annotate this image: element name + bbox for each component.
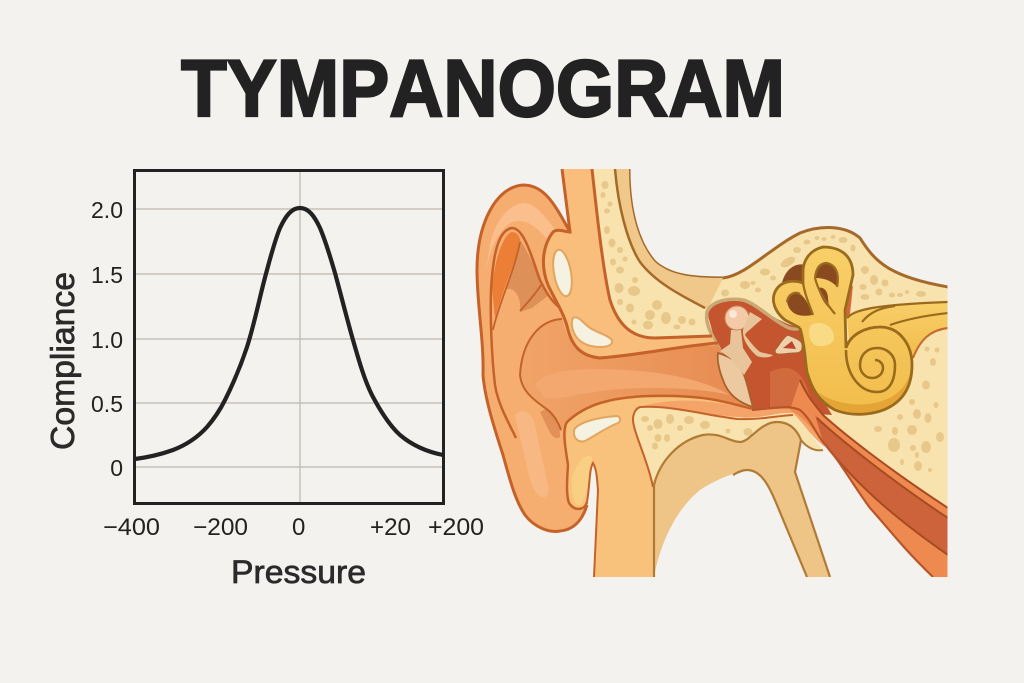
- pinna outline: [477, 185, 587, 531]
- inner ear outlines: [773, 247, 912, 414]
- mandible tan: [654, 422, 830, 577]
- crease shadow: [540, 408, 560, 438]
- chart frame: [134, 170, 444, 504]
- red patch behind canal: [846, 285, 853, 317]
- title: TYMPANOGRAM: [181, 42, 785, 134]
- vestibular nerve: [847, 302, 948, 358]
- ossicles: [720, 306, 802, 375]
- canal holes: [815, 263, 838, 287]
- stapes: [775, 335, 802, 354]
- bony canal band: [615, 169, 723, 310]
- grid lines: [135, 171, 442, 503]
- y axis tick labels: 2.0: [91, 197, 123, 223]
- illustration: ear anatomy: [477, 169, 948, 577]
- temporal bone: [592, 169, 948, 520]
- bony canal inner line: [615, 169, 705, 308]
- concha shadow: [505, 240, 549, 312]
- malleus head: [725, 306, 749, 330]
- x axis tick labels: +20: [370, 514, 411, 541]
- eustachian tube: [752, 380, 948, 577]
- lower jaw skin: [564, 396, 752, 577]
- y axis tick labels: 1.5: [91, 262, 123, 288]
- x axis tick labels: 0: [292, 514, 305, 541]
- scapha: [492, 232, 520, 318]
- inner fold line: [493, 242, 541, 330]
- antihelix line: [491, 228, 560, 438]
- vestibule and cochlea body: [773, 247, 912, 414]
- x axis title: Pressure: [231, 554, 366, 590]
- y axis tick labels: 0.5: [91, 391, 123, 417]
- bone pores: [600, 181, 944, 472]
- eardrum: [718, 353, 753, 407]
- curve: [135, 208, 443, 459]
- y axis tick labels: 0: [110, 455, 123, 481]
- semicircular canals cavity: [782, 264, 802, 282]
- skin around canal: [543, 169, 718, 358]
- cartilage white oval: [552, 248, 573, 298]
- y axis tick labels: [91, 197, 123, 481]
- cartilage white crescent: [572, 317, 612, 347]
- incus: [743, 312, 773, 357]
- x axis tick labels: [103, 514, 484, 541]
- lower temporal bone: [633, 407, 823, 487]
- pinna: [477, 185, 592, 531]
- cochlea lower shade: [818, 374, 910, 413]
- chart: tympanogram curve: [44, 170, 484, 590]
- cochlea spiral: [846, 348, 895, 392]
- vestibule highlight: [809, 323, 834, 346]
- x axis tick labels: −200: [193, 514, 248, 541]
- ear canal: [520, 319, 752, 438]
- lower bone pores: [641, 414, 752, 450]
- malleus handle: [720, 330, 752, 375]
- x axis tick labels: −400: [103, 514, 160, 541]
- x axis tick labels: +200: [428, 514, 484, 541]
- canal outlines: [520, 319, 562, 430]
- cartilage white patch: [574, 416, 620, 441]
- tympanic band: [640, 401, 825, 447]
- helix highlight: [486, 203, 555, 267]
- canal highlight: [535, 369, 730, 398]
- y axis tick labels: 1.0: [91, 327, 123, 353]
- lobe highlight: [515, 411, 549, 497]
- y axis title: Compliance: [44, 272, 81, 450]
- inner ear: [773, 247, 948, 414]
- tympanic cavity: [707, 299, 832, 415]
